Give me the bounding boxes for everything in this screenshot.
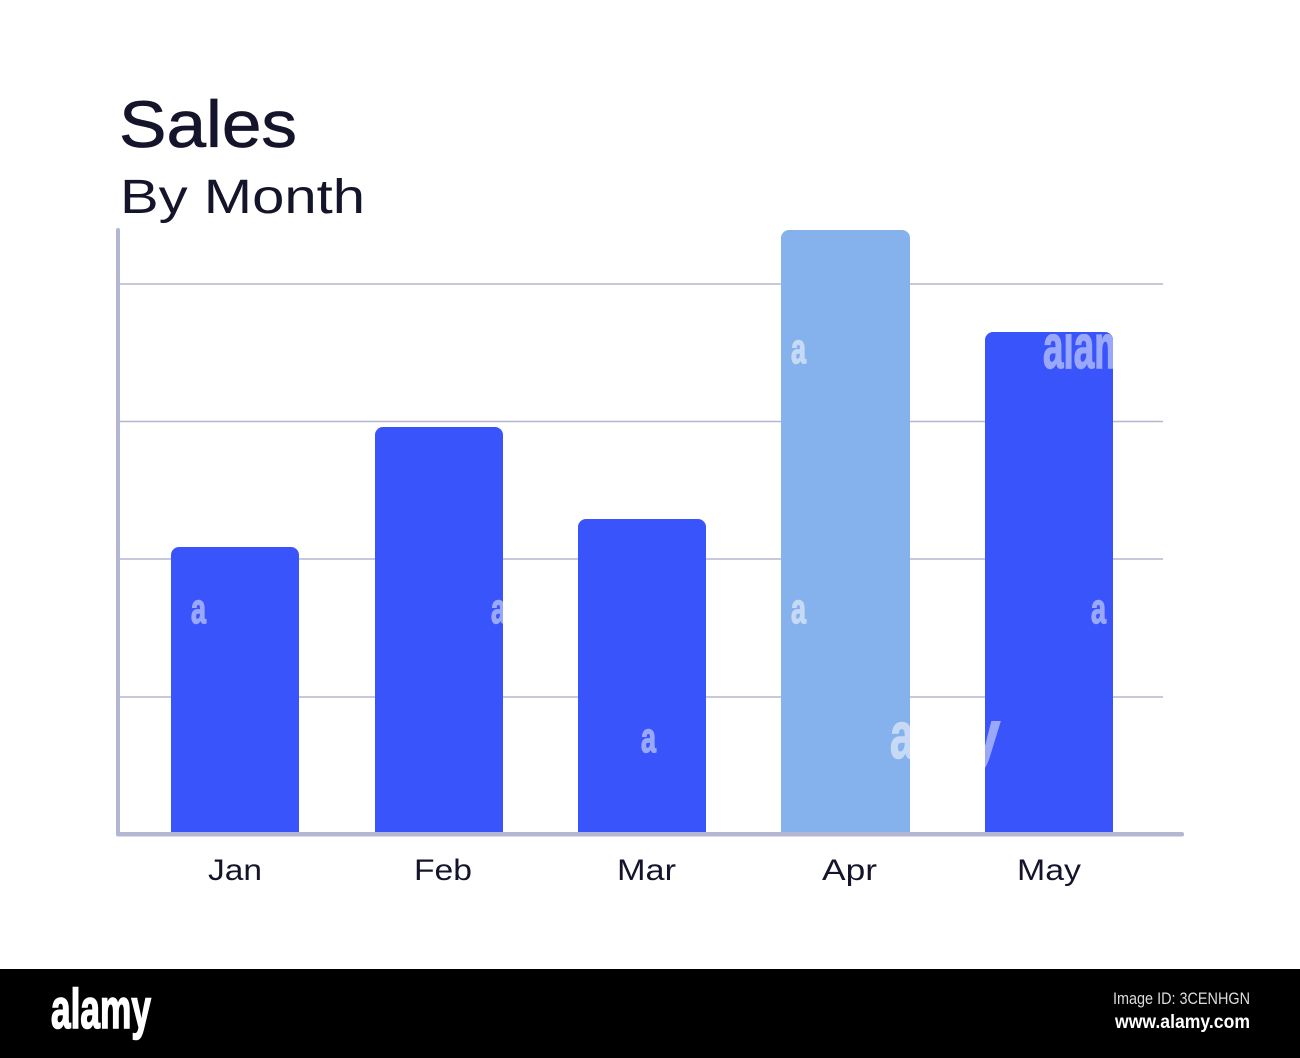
watermark fragments on bars: alam	[1043, 313, 1127, 382]
watermark fragments on bars: a	[791, 585, 806, 632]
month labels: Mar	[617, 854, 676, 887]
subtitle: By Month	[120, 171, 365, 224]
month labels: May	[1017, 854, 1081, 887]
x axis	[116, 832, 1184, 836]
footer logo: alamy	[51, 977, 151, 1040]
month labels: Apr	[822, 854, 877, 887]
footer image id: Image ID: 3CENHGN	[1113, 989, 1250, 1008]
watermark fragments on bars: a	[191, 585, 206, 632]
watermark fragments on bars: a	[1091, 585, 1106, 632]
title: Sales	[119, 87, 297, 161]
bar: May	[985, 332, 1113, 833]
chart grid lines	[120, 284, 1163, 697]
watermark fragments on bars: a	[491, 585, 506, 632]
bar: Apr (highlighted)	[781, 230, 910, 833]
bar: Jan	[171, 547, 299, 833]
watermark fragments on bars	[191, 313, 1127, 772]
footer url: www.alamy.com	[1114, 1012, 1250, 1033]
watermark fragments on bars: y	[970, 697, 1000, 771]
month labels: Jan	[208, 854, 262, 887]
watermark fragments on bars: a	[791, 325, 806, 372]
month labels: Feb	[414, 854, 472, 887]
y axis	[116, 228, 120, 836]
bar: Feb	[375, 427, 503, 833]
bar: Mar	[578, 519, 706, 833]
watermark fragments on bars: a	[890, 698, 915, 772]
watermark fragments on bars: a	[641, 714, 656, 761]
footer band	[0, 969, 1300, 1058]
month labels	[208, 854, 1081, 887]
